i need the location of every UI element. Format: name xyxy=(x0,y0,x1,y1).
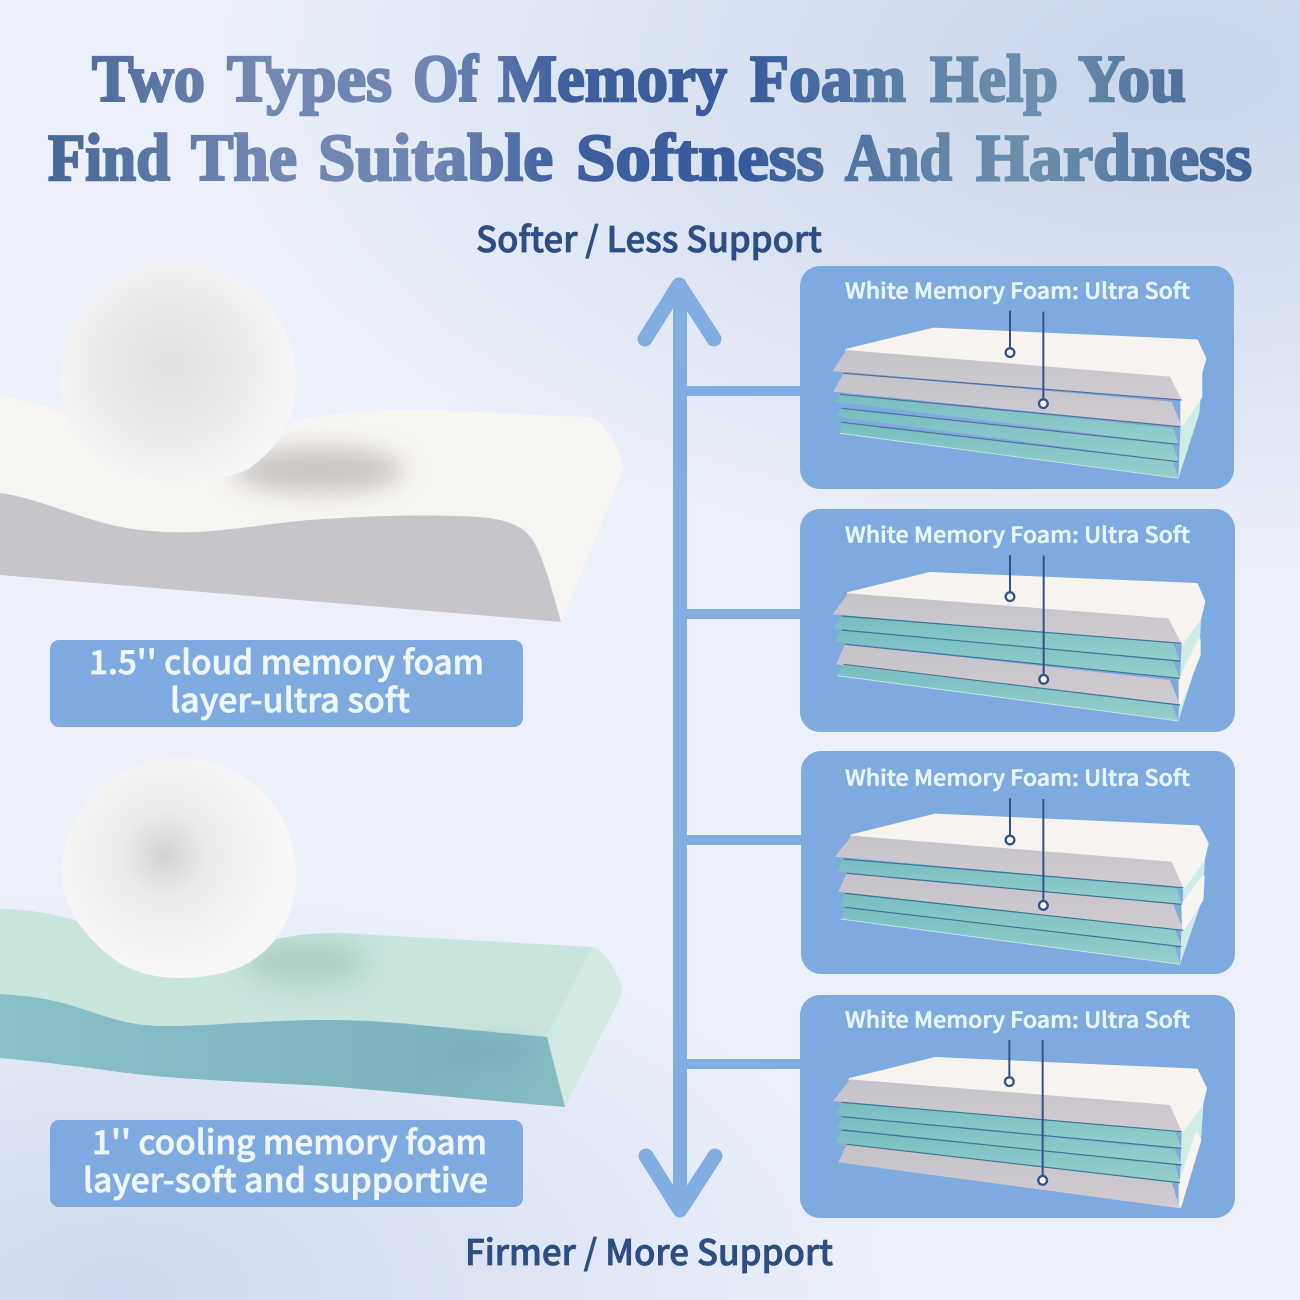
white ball xyxy=(62,758,296,978)
callout pins xyxy=(1005,1040,1047,1185)
panel: stack 1 xyxy=(800,266,1234,489)
title: Suitable xyxy=(318,121,553,195)
panel: stack 2: White Memory Foam: Ultra Soft xyxy=(845,518,1190,549)
label: cooling memory foam: 1'' cooling memory foam xyxy=(92,1116,487,1164)
panel: stack 1: White Memory Foam: Ultra Soft xyxy=(845,274,1190,305)
label: cloud memory foam: 1.5'' cloud memory foam xyxy=(89,636,484,684)
callout pins xyxy=(1006,798,1048,910)
title xyxy=(48,42,1252,195)
title: Of xyxy=(413,42,479,116)
ball shadow xyxy=(243,938,367,986)
panel: stack 4 xyxy=(800,995,1235,1218)
foam layers xyxy=(833,573,1204,721)
title: The xyxy=(191,121,297,195)
title: Memory xyxy=(498,42,727,116)
title: And xyxy=(845,121,952,195)
foam sample: cooling green foam with ball xyxy=(0,758,622,1107)
panel: stack 3 xyxy=(801,751,1235,974)
green foam slab xyxy=(0,909,622,1107)
label: cooling memory foam: layer-soft and supportive xyxy=(83,1154,488,1202)
callout pins xyxy=(1006,555,1048,684)
label: cooling memory foam xyxy=(50,1116,523,1207)
title: Types xyxy=(227,42,392,116)
foam layers xyxy=(832,329,1205,478)
double-headed arrow with connectors xyxy=(645,285,802,1210)
heading: firmer end of scale: Firmer / More Support xyxy=(465,1225,833,1276)
ball shadow xyxy=(233,448,403,492)
white foam slab xyxy=(0,395,622,622)
title: Find xyxy=(48,121,170,195)
foam sample: white cloud foam with ball xyxy=(0,262,622,622)
foam layers xyxy=(835,815,1207,964)
heading: softer end of scale: Softer / Less Support xyxy=(476,212,822,263)
callout pins xyxy=(1006,311,1048,408)
title: Foam xyxy=(750,42,906,116)
foam layers xyxy=(833,1058,1206,1208)
panel: stack 4: White Memory Foam: Ultra Soft xyxy=(845,1004,1190,1035)
title: Softness xyxy=(576,121,824,195)
label: cloud memory foam: layer-ultra soft xyxy=(170,674,410,722)
title: Help xyxy=(930,42,1058,116)
panel: stack 2 xyxy=(800,509,1235,732)
panel: stack 3: White Memory Foam: Ultra Soft xyxy=(845,762,1190,793)
label: cloud memory foam xyxy=(50,636,523,727)
title: Two xyxy=(92,42,205,116)
title: You xyxy=(1078,42,1186,116)
title: Hardness xyxy=(976,121,1252,195)
white ball xyxy=(60,262,296,481)
